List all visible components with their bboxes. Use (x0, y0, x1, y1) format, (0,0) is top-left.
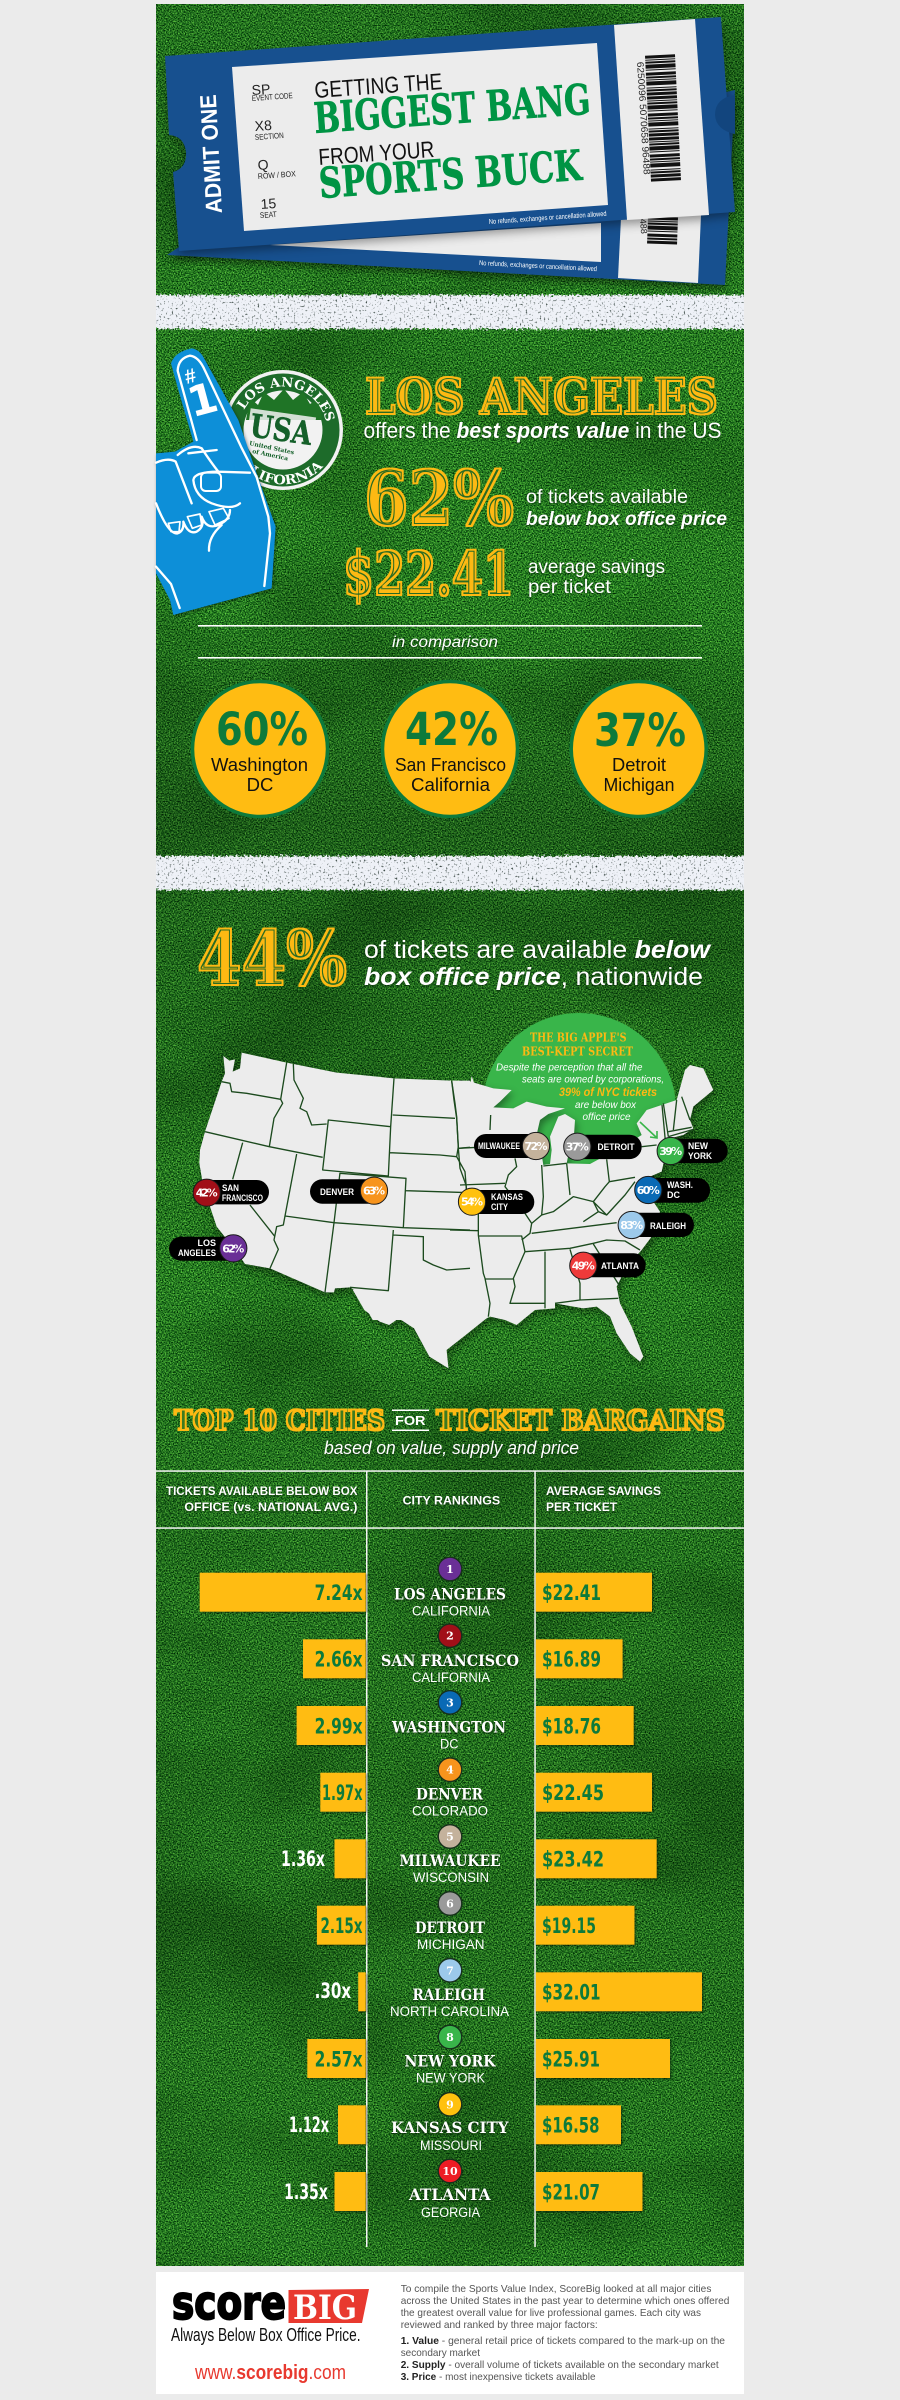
row 6: Detroit (317, 1892, 634, 1952)
pill: Washington DC: DC (667, 1190, 680, 1200)
stamp: Los Angeles USA: USA (248, 407, 315, 453)
pill: New York: YORK (688, 1151, 712, 1161)
map borders: west (205, 1063, 470, 1292)
pill: Los Angeles: LOS (197, 1238, 216, 1248)
table headers: AVERAGE SAVINGS (546, 1484, 661, 1498)
row 4: Denver (320, 1758, 652, 1818)
pill: San Francisco: 42% (196, 1187, 218, 1200)
heading: Top 10 cities for ticket bargains: FOR (395, 1413, 426, 1428)
row 3: Washington (297, 1691, 634, 1752)
row 1: Los Angeles: CALIFORNIA (412, 1603, 490, 1618)
pill: Atlanta: 49% (572, 1260, 595, 1273)
table headers: OFFICE (vs. NATIONAL AVG.) (184, 1500, 357, 1514)
stamp: Los Angeles USA: of America (252, 448, 289, 463)
row 8: New York: NEW YORK (416, 2070, 485, 2086)
row 6: Detroit: $19.15 (542, 1914, 596, 1938)
stat: 62 percent: of tickets available (526, 487, 688, 508)
row 2: San Francisco: 2.66x (315, 1648, 363, 1672)
stamp: Los Angeles USA (229, 370, 343, 490)
seat details: SEAT (260, 210, 277, 220)
website: www.scorebig.com (194, 2362, 346, 2384)
seat details (251, 81, 297, 220)
pill: Washington DC (635, 1176, 710, 1204)
row 3: Washington: 3 (446, 1696, 454, 1709)
pill: Los Angeles: 62% (222, 1242, 244, 1255)
row 4: Denver: COLORADO (412, 1803, 488, 1818)
circle: San Francisco California: California (411, 774, 491, 795)
pill: Washington DC: 60% (637, 1184, 660, 1197)
row 5: Milwaukee: 1.36x (281, 1847, 325, 1871)
table headers: TICKETS AVAILABLE BELOW BOX (166, 1484, 358, 1498)
row 7: Raleigh (315, 1958, 702, 2019)
methodology text: 3. Price - most inexpensive tickets available (401, 2371, 596, 2383)
seat details: SECTION (255, 131, 284, 142)
row 9: Kansas City: MISSOURI (420, 2138, 482, 2153)
row 9: Kansas City: 1.12x (289, 2113, 329, 2137)
pill: Los Angeles: ANGELES (178, 1248, 216, 1258)
back ticket: No refunds, exchanges or cancellation allowed (479, 260, 597, 273)
pill: Milwaukee: 72% (524, 1140, 548, 1153)
row 2: San Francisco: $16.89 (542, 1648, 601, 1672)
pill: Denver: 63% (363, 1185, 385, 1198)
chalk line middle (150, 856, 750, 890)
seat details: Q (257, 156, 269, 173)
callout text: Big Apple: THE BIG APPLE'S (530, 1031, 626, 1045)
grass field background (156, 4, 744, 2266)
stat: 44 percent nationwide: of tickets are available below (364, 936, 712, 964)
table grid (156, 1470, 744, 2247)
methodology text: 2. Supply - overall volume of tickets available on the secondary market (401, 2359, 719, 2371)
front ticket: No refunds, exchanges or cancellation allowed (489, 211, 607, 226)
ticket stub panel (614, 19, 709, 220)
foam finger (156, 348, 276, 615)
callout text: Big Apple: are below box (575, 1099, 637, 1111)
tagline: Always Below Box Office Price. (171, 2325, 360, 2345)
barcode (634, 55, 666, 181)
row 1: Los Angeles: $22.41 (542, 1581, 601, 1605)
circle: Detroit Michigan: Detroit (612, 754, 666, 775)
heading: Los Angeles: LOS ANGELES (365, 367, 718, 426)
row 10: Atlanta: 1.35x (284, 2180, 328, 2204)
callout text: Big Apple: BEST-KEPT SECRET (522, 1045, 633, 1059)
methodology text: reviewed and ranked by three major factors: (401, 2319, 598, 2331)
foam finger: # (182, 365, 199, 389)
methodology text: 1. Value - general retail price of tickets compared to the mark-up on the (401, 2335, 725, 2347)
map land: east (450, 1065, 713, 1362)
row 8: New York (307, 2025, 670, 2086)
pill: Kansas City (458, 1188, 534, 1215)
row 2: San Francisco (303, 1624, 623, 1685)
pill: Washington DC: WASH. (667, 1180, 693, 1190)
ticket title: BIGGEST BANG (312, 75, 592, 143)
row 4: Denver: 4 (446, 1764, 454, 1777)
methodology text: the greatest overall value for live professional games. Each city was (401, 2307, 701, 2319)
ticket notch (715, 95, 735, 134)
admit one: ADMIT ONE (195, 94, 227, 214)
seat details: SP (251, 81, 271, 98)
row 1: Los Angeles (200, 1557, 652, 1618)
row 3: Washington: 2.99x (315, 1714, 363, 1738)
ticket title: GETTING THE (314, 68, 443, 103)
row 8: New York: $25.91 (542, 2047, 600, 2071)
stamp: Los Angeles USA: LOS ANGELES (236, 376, 335, 421)
callout arrow (640, 1122, 657, 1138)
circle: Washington DC: 60% (216, 703, 308, 756)
methodology text: secondary market (401, 2347, 480, 2359)
row 5: Milwaukee (281, 1825, 657, 1885)
row 6: Detroit: 6 (446, 1898, 454, 1910)
row 4: Denver: DENVER (416, 1784, 484, 1803)
row 9: Kansas City: KANSAS CITY (391, 2118, 509, 2137)
pill: Milwaukee (474, 1132, 550, 1160)
row 5: Milwaukee: MILWAUKEE (400, 1851, 500, 1870)
circle: Detroit Michigan: 37% (594, 704, 686, 757)
pill: Atlanta: ATLANTA (601, 1261, 639, 1271)
row 3: Washington: WASHINGTON (391, 1718, 506, 1737)
callout text: Big Apple: office price (582, 1111, 631, 1123)
foam finger: 1 (182, 372, 223, 427)
pill: Kansas City: CITY (491, 1202, 508, 1212)
row 1: Los Angeles: LOS ANGELES (394, 1584, 506, 1603)
row 10: Atlanta: $21.07 (542, 2180, 600, 2204)
second barcode (638, 217, 663, 245)
callout text: Big Apple: seats are owned by corporations, (522, 1074, 664, 1086)
seat details: 15 (260, 195, 277, 212)
stamp: Los Angeles USA: United States (249, 440, 295, 457)
row 2: San Francisco: 2 (446, 1630, 454, 1643)
US map (199, 1053, 713, 1368)
pill: San Francisco (193, 1179, 269, 1206)
pill: Los Angeles (169, 1235, 247, 1262)
row 3: Washington: DC (440, 1737, 459, 1752)
row 7: Raleigh: $32.01 (542, 1981, 600, 2005)
row 2: San Francisco: SAN FRANCISCO (381, 1651, 519, 1670)
pill: Raleigh: 83% (620, 1219, 643, 1232)
row 7: Raleigh: .30x (315, 1979, 351, 2003)
pill: Kansas City: 54% (461, 1196, 483, 1209)
ScoreBig logo: BIG (293, 2288, 357, 2328)
pill: San Francisco: FRANCISCO (222, 1193, 263, 1203)
ScoreBig logo: score (172, 2276, 286, 2330)
ticket main panel (232, 43, 608, 231)
pill: Denver (310, 1177, 388, 1204)
row 1: Los Angeles: 1 (446, 1563, 454, 1576)
stat: average savings: average savings (528, 557, 665, 578)
subheading: based on value: based on value, supply and price (324, 1438, 579, 1458)
stat: 44 percent nationwide (197, 914, 712, 1003)
circle: Washington DC: Washington (211, 754, 308, 775)
callout text: Big Apple (496, 1031, 664, 1123)
heading: Top 10 cities for ticket bargains: TICKET BARGAINS (436, 1404, 725, 1437)
map borders: east (450, 1081, 693, 1317)
map land: Texas (353, 1253, 491, 1368)
second barcode: 488 (638, 218, 649, 234)
pill: Detroit (564, 1133, 642, 1160)
front ticket (165, 17, 735, 251)
stat: 62 percent (364, 454, 727, 543)
ticket title: FROM YOUR (318, 136, 435, 170)
stat: 44 percent nationwide: box office price , nationwide (364, 963, 703, 991)
ticket title: SPORTS BUCK (317, 141, 584, 208)
circle: Detroit Michigan (571, 682, 706, 816)
row 5: Milwaukee: WISCONSIN (413, 1870, 489, 1885)
heading: Top 10 cities for ticket bargains (174, 1404, 725, 1437)
heading: Top 10 cities for ticket bargains: TOP 10 CITIES (174, 1404, 385, 1437)
table headers: CITY RANKINGS (403, 1494, 500, 1508)
row 10: Atlanta: 10 (442, 2165, 458, 2178)
pill: Kansas City: KANSAS (491, 1192, 523, 1202)
row 10: Atlanta: GEORGIA (421, 2205, 480, 2220)
pill: Raleigh (618, 1211, 694, 1239)
row 1: Los Angeles: 7.24x (315, 1581, 363, 1605)
stamp: Los Angeles USA: CALIFORNIA (254, 462, 324, 484)
row 4: Denver: $22.45 (542, 1781, 604, 1805)
stat: 62 percent: below box office price (526, 509, 727, 530)
methodology text: To compile the Sports Value Index, ScoreBig looked at all major cities (401, 2283, 711, 2295)
row 6: Detroit: 2.15x (320, 1914, 363, 1938)
row 2: San Francisco: CALIFORNIA (412, 1670, 490, 1685)
row 6: Detroit: DETROIT (415, 1918, 485, 1937)
row 3: Washington: $18.76 (542, 1714, 601, 1738)
row 7: Raleigh: NORTH CAROLINA (390, 2004, 509, 2019)
callout circle (482, 1013, 676, 1207)
stat: average savings: $22.41 (343, 539, 514, 610)
circle: Washington DC (192, 682, 328, 816)
pill: San Francisco: SAN (222, 1183, 239, 1193)
methodology text (401, 2283, 730, 2383)
seat details: ROW / BOX (258, 169, 297, 181)
circle: Washington DC: DC (247, 774, 273, 795)
row 4: Denver: 1.97x (322, 1781, 363, 1805)
map land: west (199, 1053, 470, 1320)
row 8: New York: 8 (446, 2031, 454, 2044)
in comparison: in comparison (392, 634, 498, 651)
barcode: 6250096 5070658 96488 (634, 62, 652, 175)
row 9: Kansas City: 9 (446, 2098, 454, 2111)
pill: New York (657, 1137, 728, 1165)
methodology text: across the United States in the past year to determine which ones offered (401, 2295, 730, 2307)
circle: Detroit Michigan: Michigan (604, 774, 674, 795)
row 9: Kansas City: $16.58 (542, 2114, 600, 2138)
stat: 62 percent: 62% (364, 454, 514, 543)
circle: San Francisco California: 42% (405, 703, 498, 756)
pill: Detroit: 37% (566, 1141, 589, 1154)
pill: Denver: DENVER (320, 1187, 354, 1197)
pill: Detroit: DETROIT (598, 1142, 635, 1152)
pill: Raleigh: RALEIGH (650, 1221, 686, 1231)
row 7: Raleigh: 7 (446, 1964, 454, 1977)
pill: Atlanta (570, 1252, 646, 1279)
stat: 44 percent nationwide: 44% (197, 914, 347, 1003)
chalk line top (150, 295, 750, 329)
pill: Milwaukee: MILWAUKEE (478, 1141, 520, 1151)
row 5: Milwaukee: $23.42 (542, 1848, 604, 1872)
row 6: Detroit: MICHIGAN (417, 1937, 484, 1952)
callout text: Big Apple: 39% of NYC tickets (559, 1085, 657, 1099)
stat: average savings: per ticket (528, 577, 612, 598)
back ticket (167, 90, 735, 285)
row 8: New York: 2.57x (315, 2047, 363, 2071)
row 7: Raleigh: RALEIGH (412, 1985, 485, 2004)
ticket title (312, 68, 592, 208)
pill: New York: 39% (659, 1145, 682, 1158)
table headers: PER TICKET (546, 1500, 618, 1514)
row 10: Atlanta: ATLANTA (408, 2185, 491, 2204)
circle: San Francisco California (382, 682, 518, 816)
row 5: Milwaukee: 5 (446, 1830, 454, 1844)
row 8: New York: NEW YORK (404, 2052, 496, 2070)
callout text: Big Apple: Despite the perception that all the (496, 1062, 643, 1074)
circle: San Francisco California: San Francisco (395, 754, 506, 775)
subheading: best sports value: offers the best sports value in the US (364, 418, 722, 443)
seat details: EVENT CODE (252, 91, 293, 103)
row 9: Kansas City (289, 2092, 621, 2153)
table headers (166, 1484, 661, 1514)
footer panel (156, 2272, 744, 2394)
pill: New York: NEW (688, 1141, 708, 1151)
seat details: X8 (254, 117, 273, 134)
row 10: Atlanta (284, 2159, 642, 2220)
